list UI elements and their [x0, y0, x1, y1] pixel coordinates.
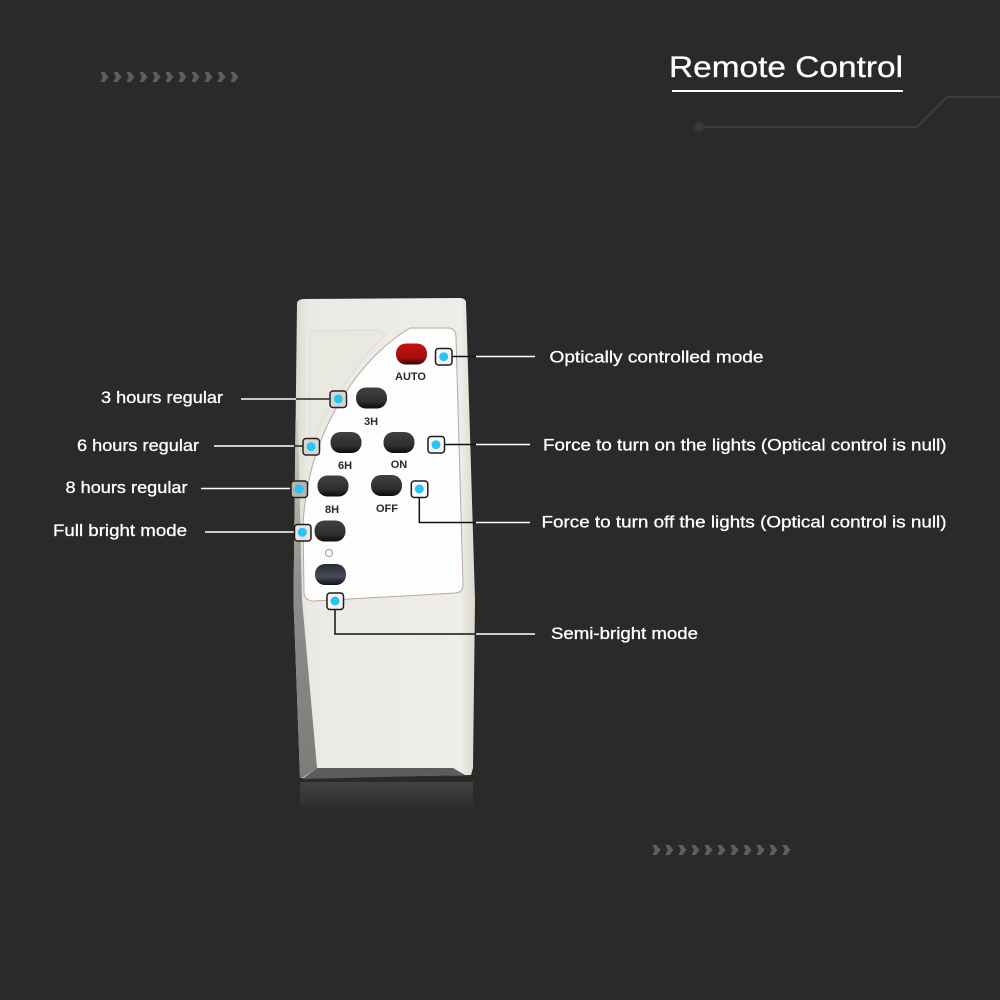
button: ON — [384, 432, 414, 471]
button: 6H — [330, 432, 362, 472]
bottom grey facet — [302, 768, 465, 779]
callout: force on: Force to turn on the lights (Optical control is null) — [543, 436, 946, 454]
callout: 3 hours regular — [101, 388, 346, 408]
button: 6H: 6H — [338, 460, 352, 472]
remote control device — [294, 298, 475, 807]
callout: semi-bright mode — [327, 593, 698, 643]
button: 8H — [318, 476, 348, 516]
recessed logo outline — [310, 330, 385, 450]
chevron row: top left — [100, 72, 238, 82]
callout: full bright mode — [53, 521, 311, 541]
circuit line decoration — [694, 97, 1000, 132]
callout: 8 hours regular: 8 hours regular — [66, 478, 188, 497]
callout: 3 hours regular: 3 hours regular — [101, 388, 223, 407]
left grey facet — [294, 420, 317, 778]
button: semi bright — [315, 564, 346, 585]
callout: force off — [411, 481, 946, 532]
title: Remote Control — [669, 51, 903, 84]
callout: 8 hours regular — [66, 478, 308, 498]
button: 3H — [356, 388, 387, 428]
callout: full bright mode: Full bright mode — [53, 521, 187, 540]
callout: semi-bright mode: Semi-bright mode — [551, 624, 698, 643]
button: 3H: 3H — [364, 416, 378, 428]
callout: optically controlled mode: Optically controlled mode — [550, 348, 764, 366]
remote body — [294, 298, 475, 778]
button: 8H: 8H — [325, 504, 339, 516]
button: OFF — [371, 475, 402, 515]
remote reflection — [300, 782, 473, 807]
button: full bright — [314, 520, 346, 556]
button: AUTO — [395, 344, 427, 383]
button: ON: ON — [391, 459, 407, 471]
callout: 6 hours regular — [77, 436, 320, 455]
callout: force off: Force to turn off the lights (Optical control is null) — [542, 512, 946, 532]
chevron row: bottom right — [652, 845, 790, 855]
white control panel — [303, 328, 463, 601]
button: OFF: OFF — [376, 503, 398, 515]
callout: 6 hours regular: 6 hours regular — [77, 436, 199, 455]
button: AUTO: AUTO — [395, 371, 426, 383]
callout: optically controlled mode — [436, 348, 764, 366]
